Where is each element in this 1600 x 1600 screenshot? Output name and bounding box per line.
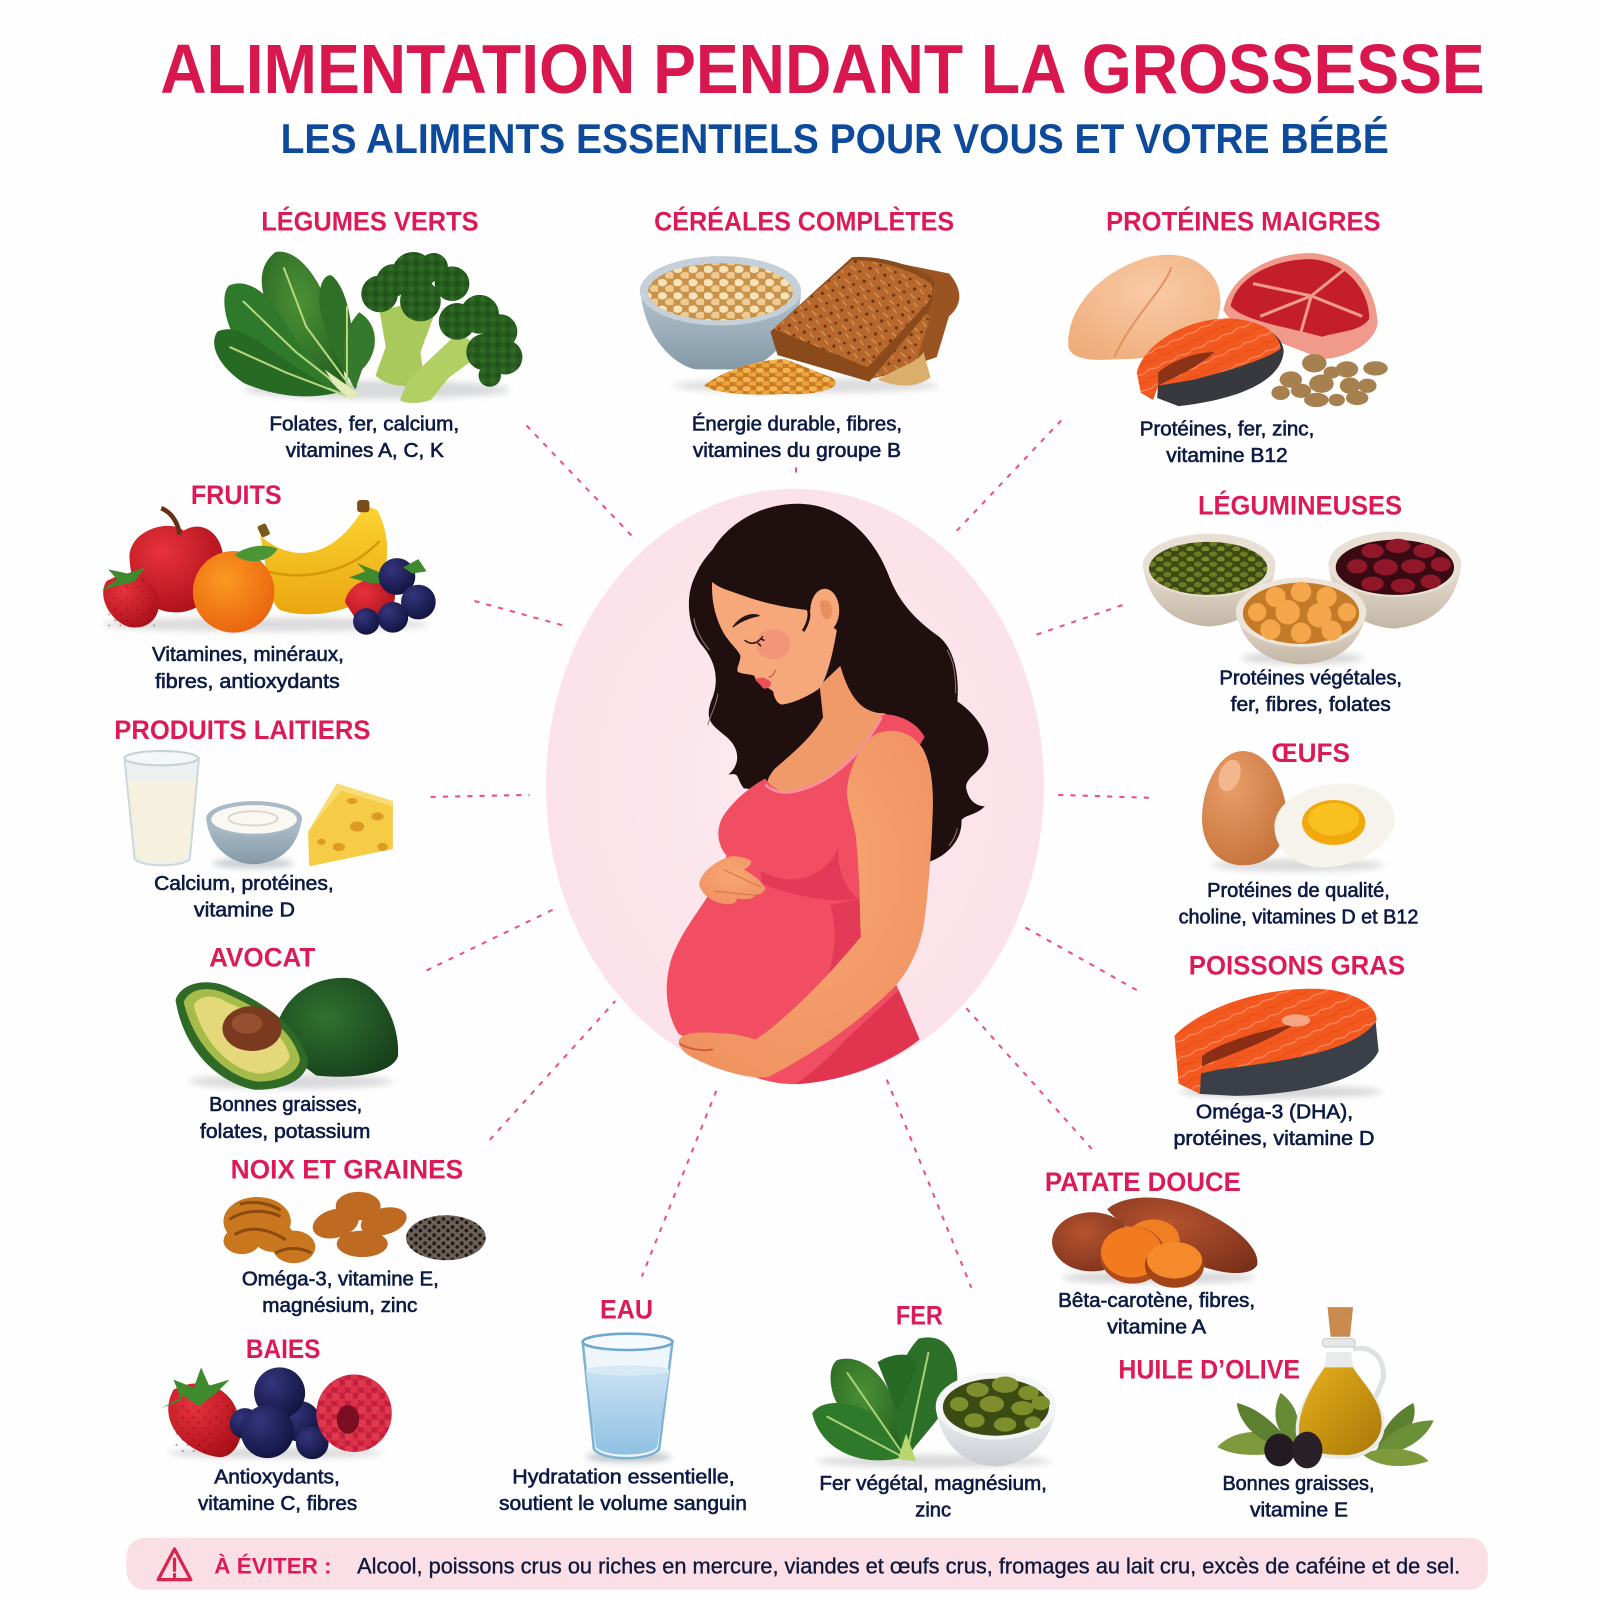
panel: fer	[812, 1300, 1056, 1521]
callout: à éviter	[127, 1538, 1488, 1590]
text: baies	[198, 1467, 357, 1515]
heading: patate douce: PATATE DOUCE	[1045, 1167, 1241, 1197]
heading: légumes verts: LÉGUMES VERTS	[261, 207, 479, 237]
icon: olive oil bottle, olives and leaves	[1217, 1307, 1434, 1468]
icon: spinach and bowl of lentils	[812, 1337, 1056, 1467]
icon: spinach and broccoli	[214, 252, 522, 403]
panel: produits laitiers	[114, 715, 393, 921]
heading: céréales complètes: CÉRÉALES COMPLÈTES	[654, 207, 954, 237]
icon: chicken, steak, salmon and beans	[1068, 253, 1388, 407]
text: poissons gras	[1173, 1101, 1374, 1150]
panel: légumineuses	[1143, 490, 1461, 716]
panel: patate douce	[1045, 1167, 1257, 1339]
icon: warning triangle	[158, 1549, 191, 1580]
icon: salmon steak	[1174, 989, 1383, 1098]
text: avocat: Bonnes graisses,	[209, 1094, 362, 1116]
text: fer: Fer végétal, magnésium,	[819, 1473, 1047, 1495]
heading: eau: EAU	[600, 1294, 653, 1324]
heading: produits laitiers: PRODUITS LAITIERS	[114, 715, 370, 745]
icon: walnuts, almonds and chia	[223, 1192, 486, 1263]
text: légumes verts	[269, 414, 459, 462]
panel: fruits	[102, 480, 436, 693]
panel: légumes verts	[214, 207, 522, 462]
text: noix et graines: Oméga-3, vitamine E,	[242, 1269, 439, 1291]
text: céréales complètes: Énergie durable, fibres,	[692, 413, 902, 436]
text: noix et graines	[242, 1269, 439, 1317]
label: à éviter: À ÉVITER :	[214, 1553, 332, 1578]
heading: baies: BAIES	[246, 1334, 320, 1364]
text: avoid list: Alcool, poissons crus ou riches en mercure, viandes et œufs crus, fromages au lait cru, excès de caféine et de sel.	[357, 1553, 1460, 1578]
text: baies: vitamine C, fibres	[198, 1493, 357, 1515]
text: eau	[499, 1467, 747, 1515]
text: baies: Antioxydants,	[214, 1467, 340, 1489]
text: céréales complètes: vitamines du groupe B	[693, 440, 901, 462]
panel: œufs	[1179, 738, 1418, 928]
text: eau: soutient le volume sanguin	[499, 1493, 747, 1515]
text: produits laitiers	[154, 873, 334, 921]
heading: fruits: FRUITS	[191, 480, 282, 510]
icon: strawberry, blueberries, raspberry	[161, 1367, 392, 1459]
text: produits laitiers: Calcium, protéines,	[154, 873, 334, 895]
illustration: pregnant woman	[667, 504, 988, 1084]
icon: sweet potatoes	[1052, 1197, 1257, 1288]
text: œufs	[1179, 880, 1418, 928]
icon: glass of water	[583, 1334, 672, 1462]
panel: huile d'olive	[1118, 1307, 1434, 1521]
central circle background	[546, 489, 1044, 1083]
text: fruits	[152, 644, 344, 693]
icon: milk, yogurt and cheese	[124, 751, 393, 868]
icon: three bowls of legumes	[1143, 532, 1461, 664]
text: noix et graines: magnésium, zinc	[262, 1295, 417, 1317]
text: protéines maigres: Protéines, fer, zinc,	[1140, 419, 1314, 441]
text: légumineuses	[1219, 668, 1402, 716]
panel: céréales complètes	[640, 207, 959, 462]
text: fer: zinc	[915, 1499, 951, 1521]
heading: huile d'olive: HUILE D’OLIVE	[1118, 1355, 1300, 1385]
heading: légumineuses: LÉGUMINEUSES	[1198, 490, 1402, 520]
icon: bowl of grains and bread	[640, 256, 959, 395]
heading: avocat: AVOCAT	[209, 942, 315, 972]
text: avocat	[200, 1094, 370, 1143]
text: légumineuses: Protéines végétales,	[1219, 668, 1402, 690]
panel: protéines maigres	[1068, 207, 1388, 467]
subtitle: LES ALIMENTS ESSENTIELS POUR VOUS ET VOTRE BÉBÉ	[281, 115, 1389, 162]
heading: protéines maigres: PROTÉINES MAIGRES	[1106, 207, 1381, 237]
text: poissons gras: Oméga-3 (DHA),	[1196, 1101, 1353, 1123]
text: protéines maigres	[1140, 419, 1314, 467]
text: huile d'olive	[1222, 1473, 1374, 1521]
text: œufs: Protéines de qualité,	[1207, 880, 1390, 902]
text: patate douce: vitamine A	[1107, 1317, 1207, 1339]
heading: fer: FER	[896, 1300, 943, 1330]
text: légumineuses: fer, fibres, folates	[1231, 694, 1391, 716]
text: avocat: folates, potassium	[200, 1121, 370, 1143]
text: légumes verts: vitamines A, C, K	[286, 440, 445, 462]
panel: poissons gras	[1173, 950, 1405, 1150]
title: ALIMENTATION PENDANT LA GROSSESSE	[160, 30, 1485, 108]
text: protéines maigres: vitamine B12	[1166, 445, 1288, 467]
text: produits laitiers: vitamine D	[194, 899, 295, 921]
text: fer	[819, 1473, 1047, 1521]
panel: noix et graines	[223, 1155, 486, 1317]
text: œufs: choline, vitamines D et B12	[1179, 906, 1418, 928]
text: huile d'olive: vitamine E	[1250, 1499, 1348, 1521]
heading: œufs: ŒUFS	[1271, 738, 1350, 768]
heading: poissons gras: POISSONS GRAS	[1189, 950, 1405, 980]
text: huile d'olive: Bonnes graisses,	[1222, 1473, 1374, 1495]
text: patate douce	[1058, 1290, 1255, 1339]
text: poissons gras: protéines, vitamine D	[1173, 1128, 1374, 1150]
icon: egg and halved egg	[1202, 751, 1395, 871]
text: eau: Hydratation essentielle,	[512, 1467, 735, 1489]
text: patate douce: Bêta-carotène, fibres,	[1058, 1290, 1255, 1312]
panel: eau	[499, 1294, 747, 1515]
panel: avocat	[176, 942, 398, 1143]
text: fruits: fibres, antioxydants	[155, 671, 340, 693]
icon: fruit group	[102, 500, 436, 635]
icon: avocado	[176, 978, 398, 1090]
heading: noix et graines: NOIX ET GRAINES	[231, 1155, 463, 1185]
panel: baies	[161, 1334, 392, 1515]
text: céréales complètes	[692, 413, 902, 462]
text: légumes verts: Folates, fer, calcium,	[269, 414, 459, 436]
text: fruits: Vitamines, minéraux,	[152, 644, 344, 666]
